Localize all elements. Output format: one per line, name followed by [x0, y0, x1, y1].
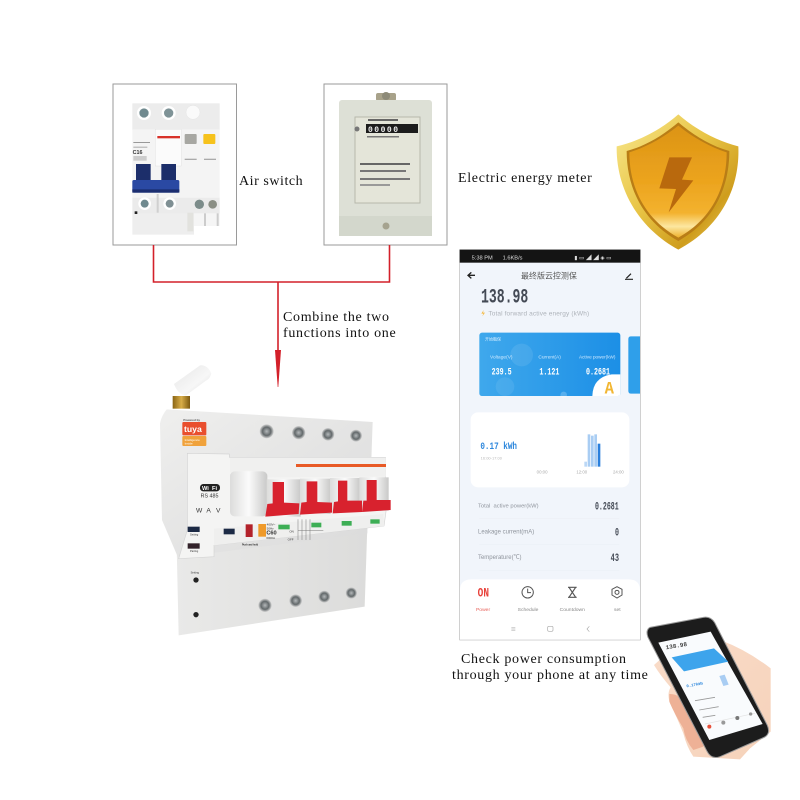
wifi rs485 markings: RS 485 — [201, 493, 218, 499]
status bar — [460, 250, 640, 263]
blue card A — [479, 333, 620, 399]
icon: WiFi smart circuit breaker — [160, 365, 391, 635]
bottom tab bar — [460, 579, 640, 640]
status indicators and specs: ON — [289, 530, 294, 534]
text: phone caption: Check power consumption — [461, 652, 627, 667]
hand — [654, 641, 771, 759]
blue card A: 1.121 — [539, 366, 559, 377]
phone screen — [658, 632, 763, 740]
blue card A: Voltage(V) — [490, 354, 513, 360]
status indicators and specs: C60 — [266, 531, 277, 537]
tuya logo: Inside — [185, 441, 193, 445]
energy chart card: 16:00-17:00 — [481, 455, 503, 460]
breaker lower body — [177, 527, 367, 635]
data rows: Leakage current(mA) — [478, 529, 534, 535]
icon: hand holding smartphone: 138.98 — [665, 641, 688, 651]
wifi rs485 markings: Pairing — [190, 549, 199, 553]
icon: energy meter device — [339, 92, 432, 236]
icon: air switch device — [132, 103, 220, 235]
next blue card edge — [628, 336, 640, 394]
tuya logo: tuya — [184, 424, 202, 434]
data rows: Temperature(℃) — [478, 554, 522, 561]
energy chart card: 00:00 — [537, 470, 548, 475]
wifi rs485 markings: Setting — [190, 532, 199, 536]
bottom screws and buttons: Setting — [191, 570, 199, 574]
text: phone caption — [452, 652, 649, 683]
bottom tab bar: Schedule — [518, 607, 539, 613]
tuya logo: Intelligence — [185, 438, 200, 442]
blue card A: Active power(kW) — [579, 354, 616, 359]
energy chart card — [471, 412, 629, 487]
red toggles — [265, 477, 391, 517]
icon: hand holding smartphone: 0.17kWh — [686, 681, 704, 689]
status indicators and specs: OFF — [288, 537, 294, 541]
data rows: 43 — [611, 553, 619, 565]
energy chart card: 12:00 — [576, 470, 588, 475]
icon: energy meter device: 00000 — [368, 126, 400, 135]
bottom tab bar: set — [614, 607, 621, 613]
top screws — [260, 424, 362, 442]
data rows: 0.2681 — [595, 502, 619, 514]
data rows: 0 — [615, 527, 619, 539]
bottom tab bar: Power — [476, 607, 490, 613]
wifi rs485 markings: Fi — [212, 486, 217, 492]
panel: electric energy meter image — [324, 84, 447, 245]
antenna — [173, 365, 211, 409]
total energy readout: Total forward active energy (kWh) — [488, 310, 589, 317]
icon: air switch device: C16 — [133, 150, 142, 156]
wifi rs485 markings: A — [206, 508, 211, 515]
status indicators and specs: 6000A — [266, 536, 275, 540]
text: phone caption: through your phone at any time — [452, 668, 649, 683]
wifi rs485 markings: Wi — [202, 486, 209, 492]
status bar: 5:38 PM — [472, 255, 493, 261]
status indicators and specs: 400V~ — [267, 523, 276, 527]
app header — [468, 270, 633, 280]
panel: air switch image — [113, 84, 236, 245]
text: combine caption — [283, 310, 396, 341]
text: combine caption: Combine the two — [283, 310, 390, 325]
wifi rs485 markings: W — [196, 508, 203, 515]
text: electric energy meter label: Electric energy meter — [458, 171, 593, 186]
total energy readout: 138.98 — [481, 287, 528, 310]
total energy readout — [481, 287, 589, 317]
status bar: 1.6KB/s — [503, 255, 523, 261]
data rows — [478, 502, 619, 570]
icon: gold shield with lightning bolt — [617, 114, 738, 250]
text: combine caption: functions into one — [283, 326, 396, 341]
front module — [179, 453, 386, 559]
status indicators and specs: 50Hz — [267, 526, 274, 530]
breaker upper body — [160, 409, 373, 557]
app header: 最终版云控测保 — [521, 270, 577, 280]
energy chart card: 0.17 kWh — [480, 441, 517, 452]
status indicators and specs: Push and hold — [242, 544, 259, 546]
bottom tab bar: Countdown — [560, 607, 585, 613]
wifi rs485 markings: V — [216, 508, 221, 515]
blue card A: Current(A) — [538, 354, 561, 360]
bottom tab bar: ON — [478, 585, 489, 600]
phone — [647, 617, 769, 758]
tuya logo — [182, 418, 206, 446]
panel: phone app screenshot — [460, 250, 640, 640]
blue card A: 开始融保 — [485, 335, 501, 341]
blue card A: 0.2681 — [586, 366, 610, 377]
blue card A: 239.5 — [492, 366, 512, 377]
tuya logo: Powered by — [183, 418, 200, 422]
arrow: connecting red lines merging into one — [154, 245, 390, 387]
energy chart card: 24:00 — [613, 470, 624, 475]
blue card A: A — [605, 379, 614, 399]
bottom screws and buttons — [191, 570, 357, 617]
data rows: Total active power(kW) — [478, 504, 539, 510]
text: air switch label: Air switch — [239, 174, 303, 189]
wifi rs485 markings — [188, 484, 235, 553]
status bar: ▮ ▭ ◢ ◢ ◈ ▭ — [574, 254, 612, 261]
status indicators and specs — [242, 519, 380, 546]
icon: hand holding smartphone — [647, 617, 771, 759]
